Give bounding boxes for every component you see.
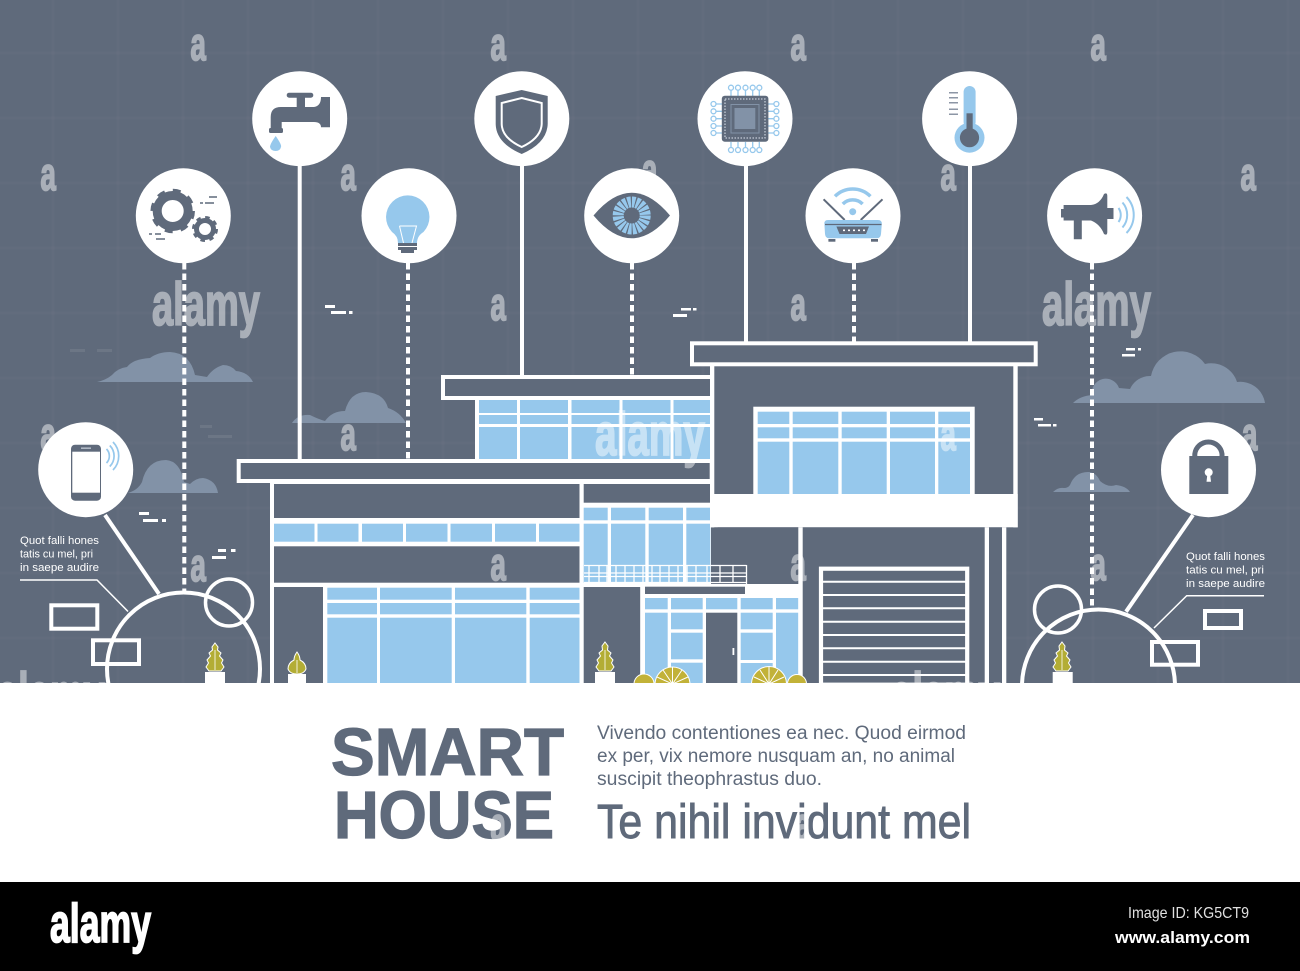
left connector to phone bbox=[105, 515, 159, 594]
right connector to lock bbox=[1126, 515, 1193, 612]
cloud: centre left bbox=[292, 392, 406, 423]
icon: light bulb bbox=[362, 168, 456, 263]
shrub 2 bbox=[654, 666, 690, 683]
entrance canopy bbox=[640, 584, 803, 683]
watermark overlay: alamy bbox=[1042, 271, 1151, 338]
potted plants bbox=[205, 642, 1073, 683]
clouds bbox=[97, 351, 1265, 493]
upper storey roof bbox=[443, 377, 712, 398]
left hub small ring bbox=[206, 579, 252, 626]
shrub 3 bbox=[751, 666, 787, 683]
watermark overlay: a bbox=[40, 150, 57, 201]
watermark overlay: a bbox=[190, 541, 207, 592]
cloud: upper left bbox=[97, 352, 253, 382]
watermark overlay: a bbox=[790, 280, 807, 331]
watermark overlay: a bbox=[790, 540, 807, 591]
left wing ground window bbox=[327, 588, 580, 683]
icon: padlock bbox=[1161, 422, 1256, 517]
house illustration bbox=[239, 343, 1036, 685]
bottom white text panel bbox=[0, 683, 1300, 882]
right block walls bbox=[710, 366, 718, 527]
plant: right side bbox=[1053, 642, 1073, 683]
garage wall bbox=[798, 527, 1006, 683]
right caption: tatis cu mel, pri bbox=[1186, 564, 1264, 576]
entrance glazing bbox=[645, 598, 798, 683]
right block roof bbox=[692, 343, 1036, 364]
balcony railing bbox=[584, 565, 746, 584]
right outline rectangle 1 bbox=[1205, 611, 1241, 628]
icon: shield bbox=[474, 71, 569, 166]
plant: left of house bbox=[205, 643, 225, 683]
icon: thermometer bbox=[922, 71, 1017, 166]
heading: SMART HOUSE bbox=[331, 715, 564, 853]
cloud: lower left bbox=[128, 460, 218, 493]
icon: megaphone bbox=[1047, 168, 1142, 263]
connector stems bbox=[184, 160, 1092, 606]
watermark overlay: a bbox=[1242, 410, 1258, 461]
watermark overlay: a bbox=[790, 20, 807, 71]
left caption: tatis cu mel, pri bbox=[20, 548, 93, 560]
icon: water tap bbox=[252, 71, 347, 166]
stem: eye (dashed) bbox=[630, 263, 634, 376]
watermark overlay: a bbox=[490, 20, 507, 71]
website: www.alamy.com bbox=[1114, 928, 1250, 947]
left hub bbox=[20, 514, 262, 683]
watermark overlay: a bbox=[490, 280, 507, 331]
motion dashes bbox=[139, 305, 1141, 559]
plant: centre wall bbox=[595, 642, 615, 683]
watermark overlay: a bbox=[490, 540, 507, 591]
right outline rectangle 2 bbox=[1152, 642, 1198, 665]
left leader line bbox=[20, 580, 128, 612]
watermark overlay: alamy bbox=[152, 271, 260, 338]
plant: front of main wing bbox=[288, 652, 306, 683]
watermark overlay: a bbox=[190, 20, 207, 71]
right caption: in saepe audire bbox=[1186, 578, 1265, 590]
icon: wifi router bbox=[806, 168, 900, 263]
stem: router (dashed) bbox=[852, 263, 856, 342]
stem: chip bbox=[744, 160, 748, 342]
left wing strip window bbox=[274, 524, 580, 542]
right block upper wall bbox=[714, 366, 1013, 494]
icon: eye bbox=[584, 168, 679, 263]
main roof bbox=[239, 461, 712, 481]
footer logo: alamy bbox=[50, 892, 151, 954]
icon: microchip bbox=[698, 71, 792, 166]
watermark overlay: a bbox=[795, 800, 811, 851]
right hub large arc bbox=[1020, 608, 1177, 683]
watermark overlay: alamy bbox=[0, 661, 105, 728]
left outline rectangle 2 bbox=[93, 640, 139, 664]
icon: gears bbox=[136, 168, 231, 263]
right block lower left wall bbox=[714, 527, 798, 585]
right leader line bbox=[1154, 596, 1264, 628]
left wing ground wall bbox=[274, 587, 323, 683]
upper storey window bbox=[475, 400, 711, 460]
left wing upper band bbox=[274, 484, 580, 518]
shrub 1 bbox=[634, 674, 654, 684]
body paragraph: Vivendo contentiones ea nec. Quod eirmod bbox=[597, 723, 966, 744]
left outline rectangle 1 bbox=[51, 605, 97, 629]
subheading: Te nihil invidunt mel bbox=[597, 796, 971, 849]
left caption bbox=[20, 535, 100, 574]
right caption bbox=[1186, 551, 1266, 590]
watermark overlay: a bbox=[940, 410, 957, 461]
cloud: lower right bbox=[1053, 472, 1130, 492]
watermark overlay: a bbox=[40, 410, 57, 461]
right hub small ring bbox=[1034, 586, 1082, 633]
right block white balcony band bbox=[710, 494, 1018, 527]
body paragraph: suscipit theophrastus duo. bbox=[597, 769, 822, 790]
heading: SMART HOUSE: HOUSE bbox=[334, 778, 554, 853]
icon: smartphone bbox=[38, 422, 133, 517]
watermark overlay: a bbox=[1090, 540, 1107, 591]
garage door bbox=[821, 569, 967, 685]
body paragraph bbox=[597, 723, 966, 790]
watermark overlay: a bbox=[1090, 20, 1107, 71]
shrub 4 bbox=[788, 674, 806, 684]
watermark overlay: a bbox=[1240, 150, 1257, 201]
stem: thermometer bbox=[968, 160, 972, 342]
watermark overlay: a bbox=[490, 800, 507, 851]
image id: Image ID: KG5CT9 bbox=[1128, 905, 1249, 922]
stem: gears (dashed) bbox=[182, 263, 186, 591]
right caption: Quot falli hones bbox=[1186, 551, 1266, 563]
stem: bulb (dashed) bbox=[406, 263, 410, 460]
watermark overlay: alamy bbox=[595, 401, 705, 468]
left wing lower band bbox=[274, 546, 580, 583]
watermark overlay: a bbox=[642, 146, 658, 197]
stem: shield bbox=[520, 160, 524, 376]
cloud: upper right bbox=[1073, 351, 1265, 403]
stem: megaphone (dashed) bbox=[1090, 263, 1094, 606]
centre section upper band bbox=[584, 484, 710, 503]
right hub bbox=[1020, 514, 1264, 683]
black footer bar bbox=[0, 882, 1300, 971]
left caption: Quot falli hones bbox=[20, 535, 100, 547]
centre section window bbox=[584, 508, 710, 583]
watermark overlay: alamy bbox=[891, 661, 1000, 728]
left wing walls bbox=[270, 483, 711, 683]
front door bbox=[706, 613, 737, 683]
round shrubs bbox=[634, 666, 807, 683]
watermark overlay: a bbox=[940, 150, 957, 201]
stem: tap bbox=[298, 160, 302, 460]
body paragraph: ex per, vix nemore nusquam an, no animal bbox=[597, 746, 955, 767]
heading: SMART HOUSE: SMART bbox=[331, 715, 564, 790]
watermark overlay: a bbox=[340, 150, 357, 201]
watermark overlay: a bbox=[340, 410, 357, 461]
centre section ground wall bbox=[584, 587, 640, 683]
left hub large arc bbox=[105, 590, 262, 683]
right block window bbox=[753, 407, 975, 495]
left caption: in saepe audire bbox=[20, 562, 99, 574]
